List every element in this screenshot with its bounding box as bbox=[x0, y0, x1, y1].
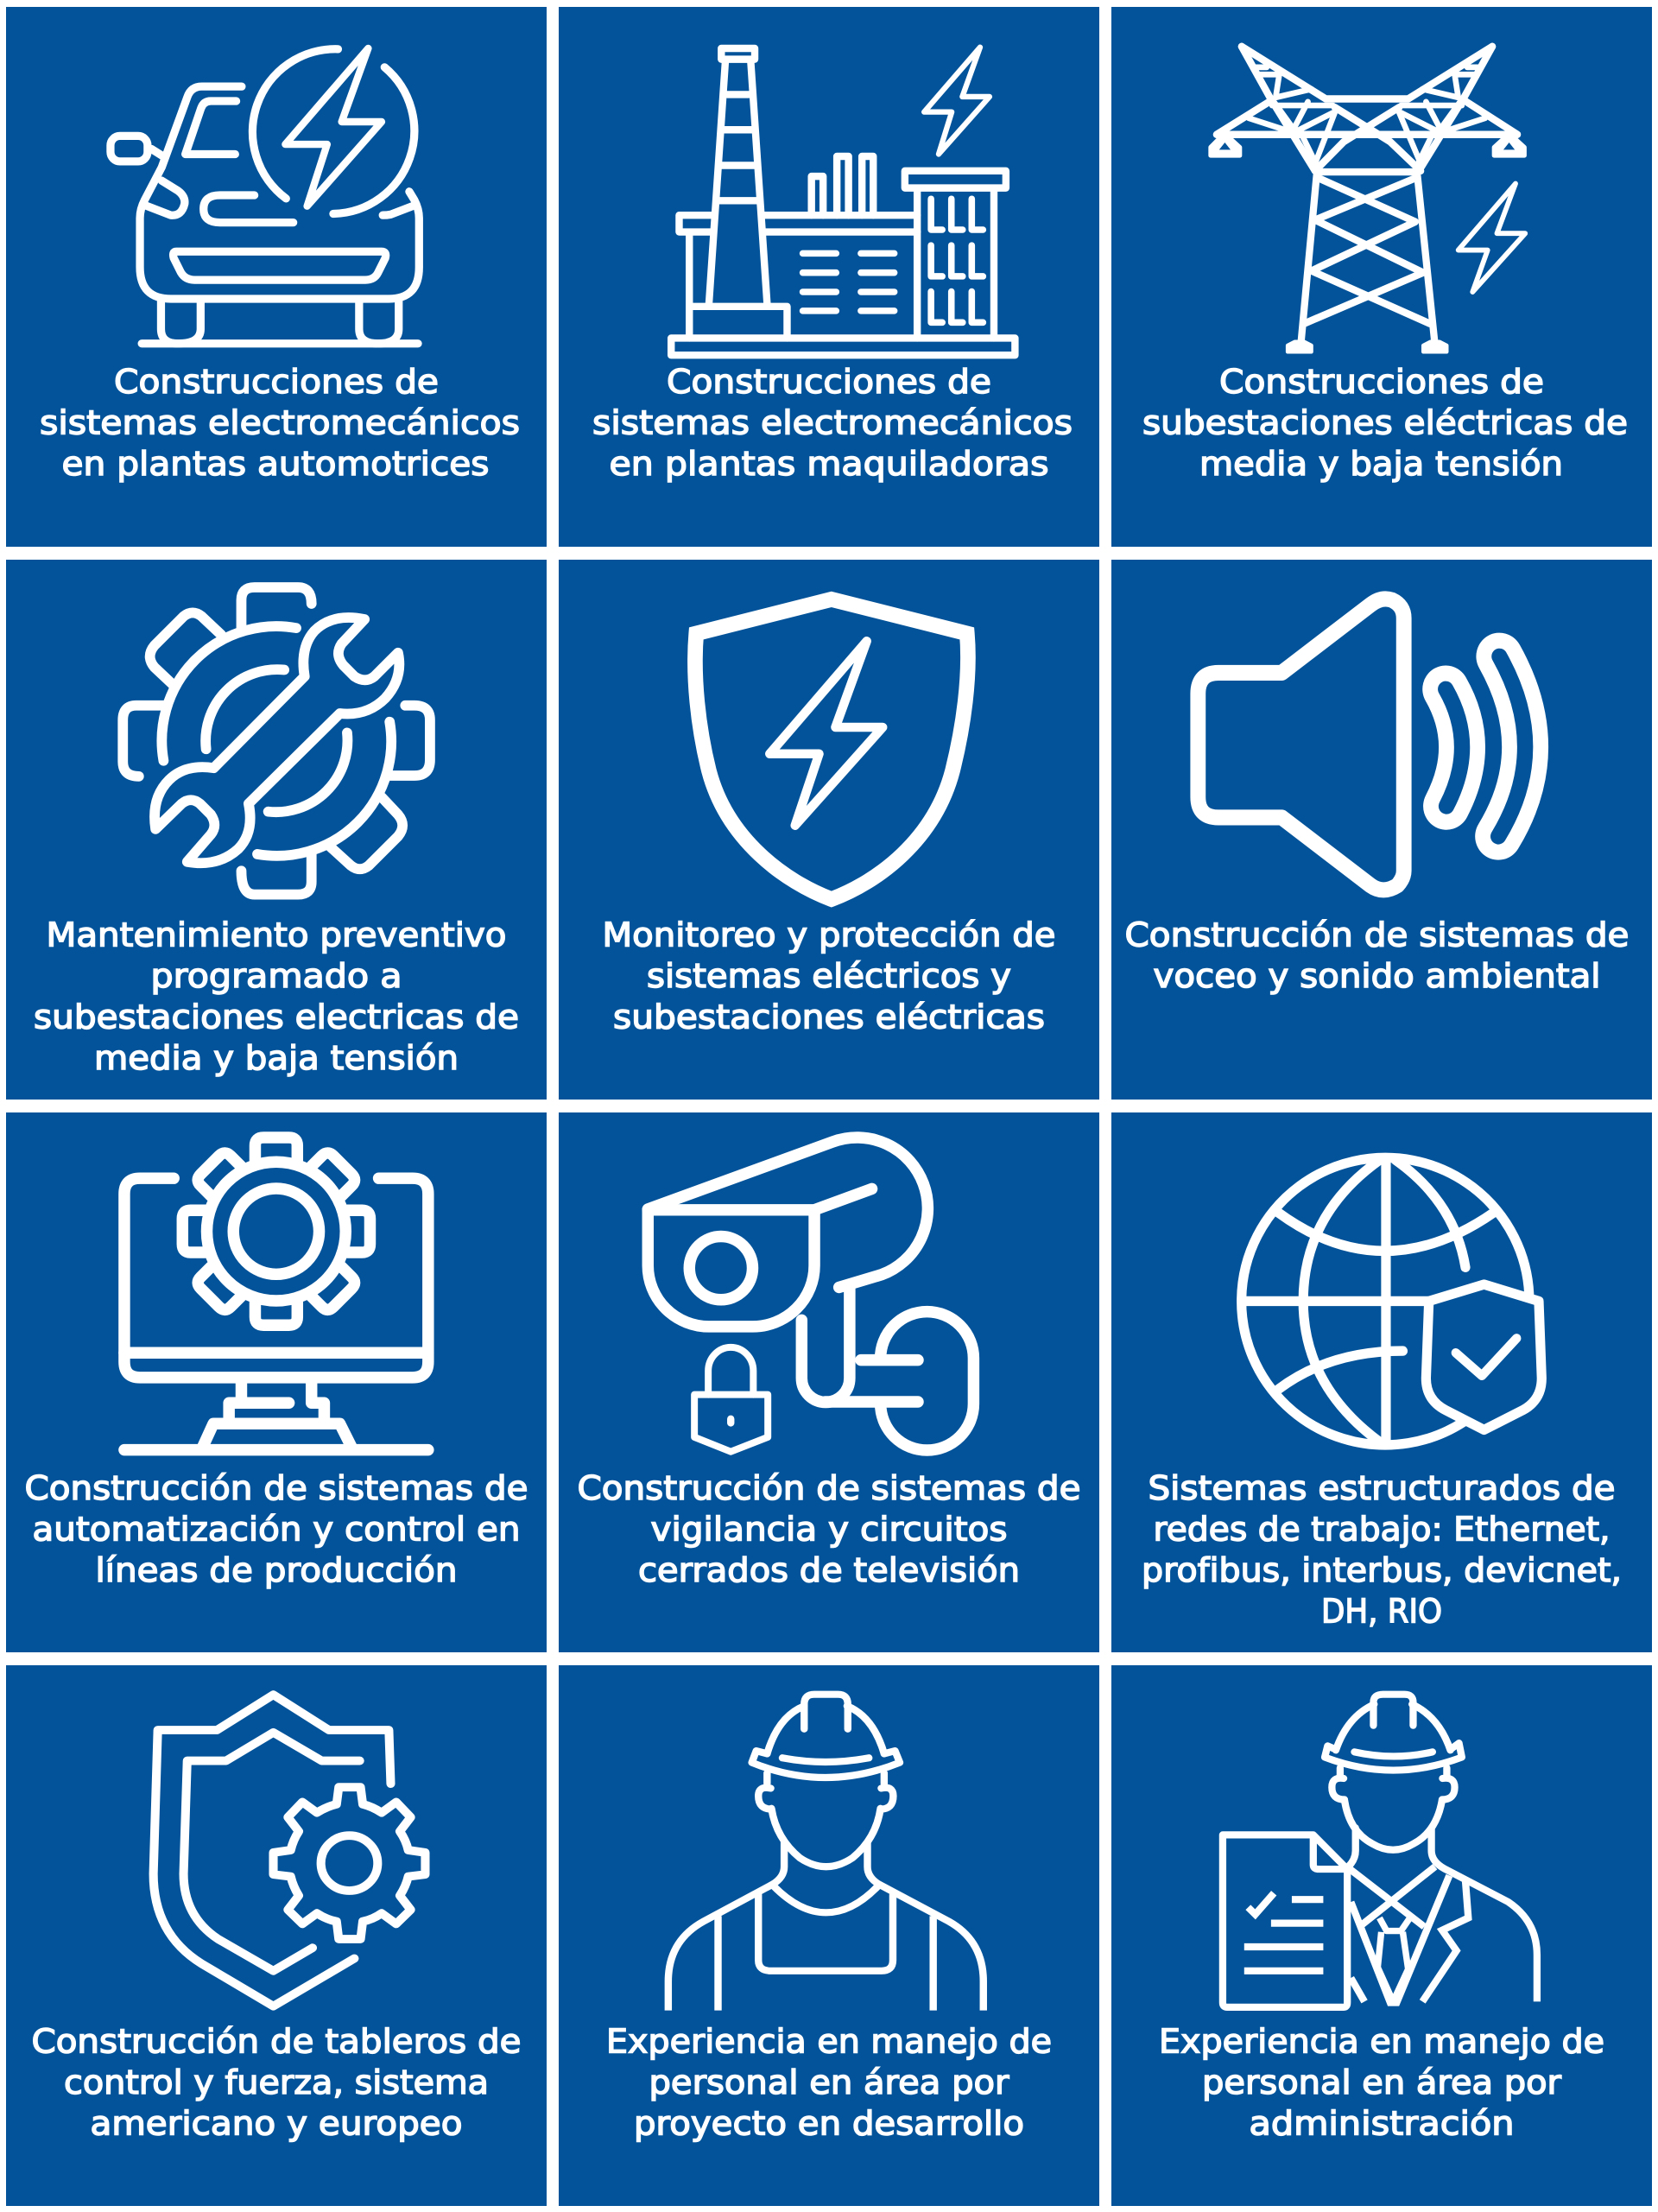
text: project personnel management: proyecto en desarrollo bbox=[634, 2104, 1024, 2144]
icon: transmission tower with lightning bolt bbox=[1211, 47, 1525, 352]
panel: administration personnel management bbox=[1111, 1665, 1652, 2206]
text: control and power boards: Construcción de tableros de bbox=[31, 2023, 522, 2061]
text: automation and control: Construcción de sistemas de bbox=[24, 1469, 528, 1508]
panel: structured network systems bbox=[1111, 1112, 1652, 1652]
text: structured network systems: profibus, interbus, devicnet, bbox=[1142, 1551, 1622, 1590]
text: preventive maintenance: programado a bbox=[150, 957, 402, 996]
text: preventive maintenance bbox=[34, 916, 519, 1078]
icon: engineer with document bbox=[1223, 1695, 1537, 2007]
text: monitoring and protection: Monitoreo y protección de bbox=[603, 916, 1055, 955]
text: monitoring and protection: sistemas eléctricos y bbox=[647, 957, 1011, 996]
text: control and power boards: americano y europeo bbox=[90, 2104, 463, 2144]
icon: security camera with padlock bbox=[648, 1138, 973, 1452]
text: project personnel management bbox=[606, 2023, 1052, 2144]
text: voice and ambient sound bbox=[1124, 916, 1629, 996]
text: surveillance and CCTV: Construcción de sistemas de bbox=[577, 1469, 1081, 1508]
text: structured network systems: DH, RIO bbox=[1321, 1593, 1442, 1631]
text: voice and ambient sound: Construcción de sistemas de bbox=[1124, 916, 1629, 955]
text: control and power boards bbox=[31, 2023, 522, 2144]
icon: shield with lightning bolt bbox=[695, 599, 968, 899]
text: preventive maintenance: media y baja tensión bbox=[94, 1039, 459, 1078]
panel: monitoring and protection bbox=[559, 560, 1099, 1100]
text: structured network systems: redes de trabajo: Ethernet, bbox=[1154, 1510, 1610, 1550]
text: administration personnel management bbox=[1159, 2023, 1604, 2144]
text: preventive maintenance: Mantenimiento preventivo bbox=[47, 916, 506, 955]
text: project personnel management: personal en área por bbox=[649, 2063, 1009, 2102]
panel: project personnel management bbox=[559, 1665, 1099, 2206]
panel: control and power boards bbox=[6, 1665, 547, 2206]
icon: globe with security shield bbox=[1242, 1157, 1541, 1445]
text: preventive maintenance: subestaciones electricas de bbox=[34, 998, 519, 1036]
text: structured network systems bbox=[1142, 1469, 1622, 1631]
text: surveillance and CCTV: cerrados de televisión bbox=[638, 1551, 1020, 1590]
text: administration personnel management: personal en área por bbox=[1202, 2063, 1561, 2102]
text: automation and control: líneas de producción bbox=[95, 1551, 458, 1590]
text: electrical substations: media y baja tensión bbox=[1199, 445, 1563, 484]
text: automotive plants: Construcciones de bbox=[114, 363, 439, 402]
text: electrical substations: subestaciones eléctricas de bbox=[1142, 404, 1628, 442]
text: control and power boards: control y fuerza, sistema bbox=[64, 2063, 489, 2102]
text: project personnel management: Experiencia en manejo de bbox=[606, 2023, 1052, 2061]
icon: construction worker bbox=[668, 1695, 984, 2011]
text: surveillance and CCTV bbox=[577, 1469, 1081, 1590]
icon: shield with gear bbox=[154, 1695, 425, 2006]
text: automation and control: automatización y control en bbox=[33, 1510, 520, 1550]
text: maquiladora plants bbox=[592, 363, 1073, 484]
panel: automotive plants bbox=[6, 7, 547, 547]
text: monitoring and protection: subestaciones eléctricas bbox=[613, 998, 1045, 1036]
panel: surveillance and CCTV bbox=[559, 1112, 1099, 1652]
icon: monitor with gear bbox=[124, 1138, 428, 1450]
text: administration personnel management: Experiencia en manejo de bbox=[1159, 2023, 1604, 2061]
panel: preventive maintenance bbox=[6, 560, 547, 1100]
text: structured network systems: Sistemas estructurados de bbox=[1149, 1469, 1615, 1508]
text: automotive plants: en plantas automotrices bbox=[62, 445, 489, 484]
text: surveillance and CCTV: vigilancia y circuitos bbox=[651, 1510, 1007, 1550]
text: maquiladora plants: sistemas electromecánicos bbox=[592, 404, 1073, 442]
text: electrical substations: Construcciones de bbox=[1219, 363, 1544, 402]
icon: loudspeaker bbox=[1198, 599, 1525, 890]
panel: automation and control bbox=[6, 1112, 547, 1652]
text: monitoring and protection bbox=[603, 916, 1055, 1036]
text: electrical substations bbox=[1142, 363, 1628, 484]
panel: electrical substations bbox=[1111, 7, 1652, 547]
icon: factory with lightning bolt bbox=[671, 48, 1015, 355]
panel: voice and ambient sound bbox=[1111, 560, 1652, 1100]
panel: maquiladora plants bbox=[559, 7, 1099, 547]
text: voice and ambient sound: voceo y sonido ambiental bbox=[1154, 957, 1601, 996]
text: administration personnel management: administración bbox=[1249, 2104, 1515, 2144]
icon: gear and wrench bbox=[123, 587, 430, 895]
text: automotive plants: sistemas electromecánicos bbox=[40, 404, 520, 442]
text: automation and control bbox=[24, 1469, 528, 1590]
text: maquiladora plants: en plantas maquiladoras bbox=[610, 445, 1048, 484]
text: automotive plants bbox=[40, 363, 520, 484]
text: maquiladora plants: Construcciones de bbox=[667, 363, 991, 402]
icon: electric car with lightning bolt bbox=[111, 48, 419, 344]
